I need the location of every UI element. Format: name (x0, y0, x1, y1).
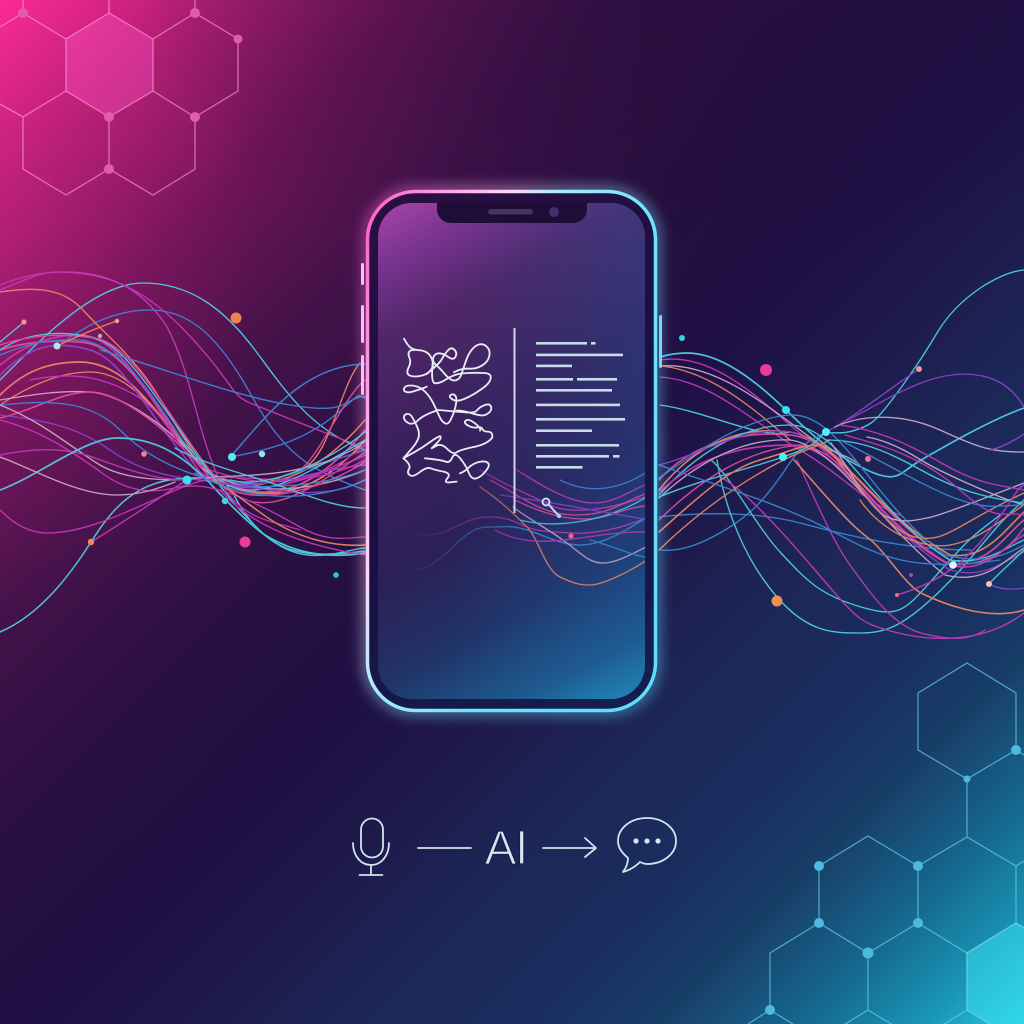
hexagon nodes (18, 8, 242, 174)
side buttons (361, 263, 662, 395)
notch (437, 203, 587, 223)
screen blue tint (378, 203, 645, 699)
floating particles: left (21, 312, 339, 578)
divider (514, 328, 516, 513)
hexagon network: top left (0, 0, 242, 195)
bright filled hexagon (967, 923, 1024, 1024)
arrow (543, 838, 596, 857)
camera (549, 207, 559, 217)
key node (542, 498, 561, 518)
phone body frame (368, 192, 656, 710)
filled hexagon (66, 13, 153, 117)
hexagon nodes (765, 745, 1021, 1015)
particle on screen (568, 533, 574, 539)
waves on screen (403, 470, 650, 585)
waves: right bundle (659, 270, 1024, 638)
phone (361, 192, 662, 710)
floating particles: right (679, 335, 992, 606)
speaker (488, 209, 533, 214)
icon: microphone (353, 818, 389, 875)
hexagon network: bottom right (748, 663, 1024, 1024)
phone screen (378, 203, 645, 699)
tangled scribble (403, 339, 492, 482)
bottom frame highlight (440, 709, 590, 712)
transcribed text lines (536, 342, 625, 469)
AI label: AI (484, 822, 527, 875)
phone glow (368, 192, 656, 710)
line to AI (418, 847, 471, 849)
flow: voice to AI to chat (353, 818, 676, 875)
waves: left bundle (0, 272, 365, 632)
icon: chat bubble (618, 818, 676, 872)
